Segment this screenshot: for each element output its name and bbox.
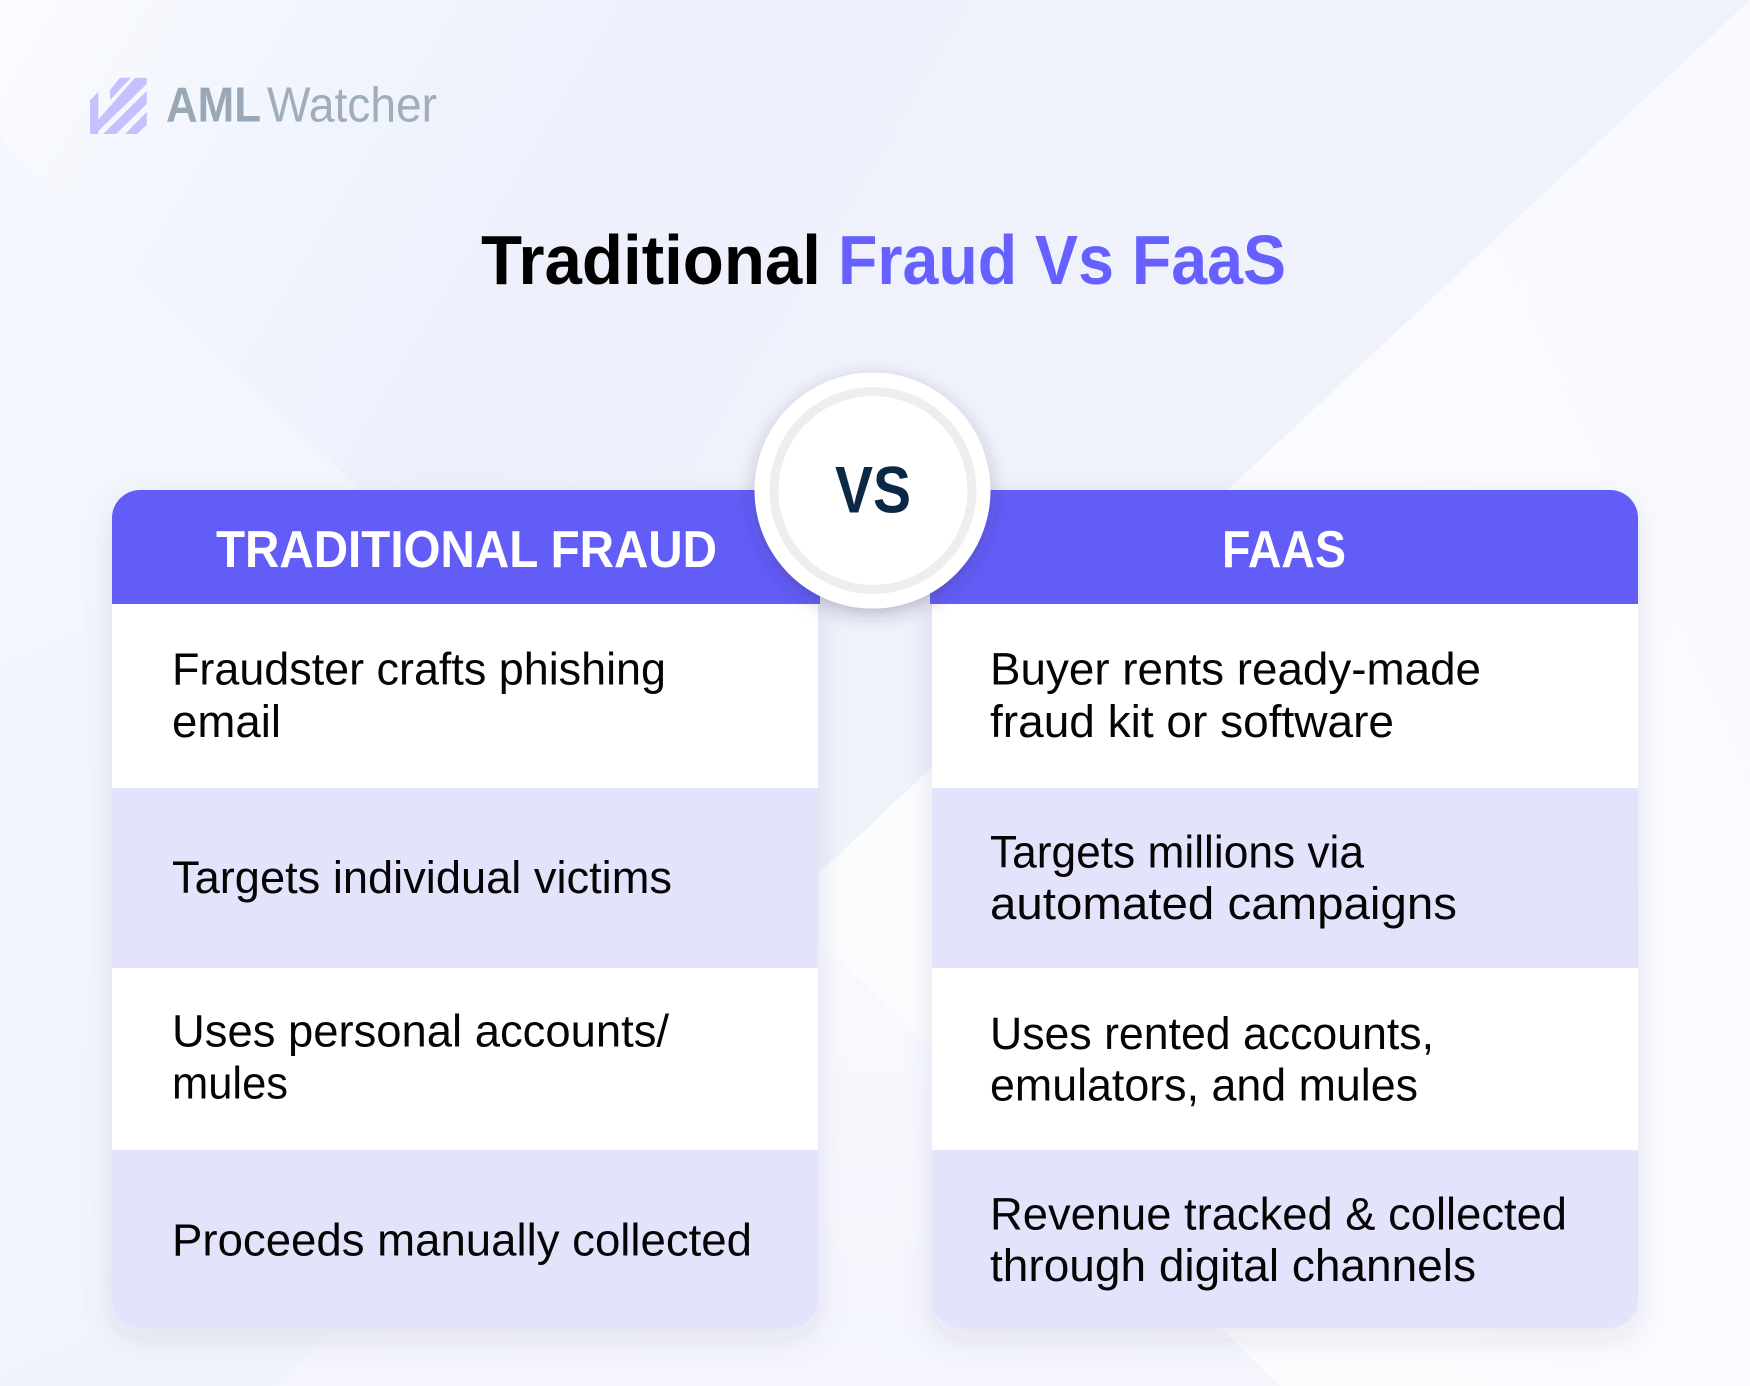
header bar [930, 490, 1638, 604]
row 1 [112, 604, 818, 788]
panel: FaaS [930, 490, 1638, 1328]
row 1: Buyer rents ready-made [990, 644, 1481, 694]
panel background and shadow [112, 490, 818, 1328]
row 4: Revenue tracked & collected [990, 1188, 1567, 1240]
row 2 [932, 788, 1638, 968]
VS badge [754, 372, 990, 608]
panel: traditional fraud [112, 490, 820, 1328]
VS badge: VS [835, 452, 911, 526]
logo wordmark second word: Watcher [267, 78, 437, 132]
row 2: automated campaigns [990, 878, 1457, 929]
row 2: Targets millions via [990, 826, 1365, 878]
row 2 [112, 788, 818, 968]
title: Traditional [481, 221, 821, 299]
row 1: Fraudster crafts phishing [172, 644, 666, 694]
row 3: mules [172, 1058, 288, 1108]
row 3: Uses rented accounts, [990, 1008, 1434, 1059]
row 4: Proceeds manually collected [172, 1214, 752, 1266]
row 3: Uses personal accounts/ [172, 1006, 669, 1056]
heading: TRADITIONAL FRAUD [216, 521, 717, 579]
title [481, 221, 1286, 299]
row 1: email [172, 696, 281, 747]
row 2: Targets individual victims [172, 852, 672, 903]
row 3 [112, 968, 818, 1150]
row 3: emulators, and mules [990, 1060, 1418, 1110]
heading: FAAS [1222, 521, 1346, 579]
row 4 [932, 1150, 1638, 1328]
panel background and shadow [932, 490, 1638, 1328]
row 3 [932, 968, 1638, 1150]
row 1: fraud kit or software [990, 696, 1394, 747]
title: Fraud Vs FaaS [838, 221, 1286, 299]
logo wordmark: AML [166, 78, 261, 132]
row 4 [112, 1150, 818, 1328]
header bar [112, 490, 820, 604]
row 4: through digital channels [990, 1240, 1476, 1291]
logo: AML Watcher [90, 78, 437, 134]
icon: striped shield [90, 78, 147, 134]
row 1 [932, 604, 1638, 788]
